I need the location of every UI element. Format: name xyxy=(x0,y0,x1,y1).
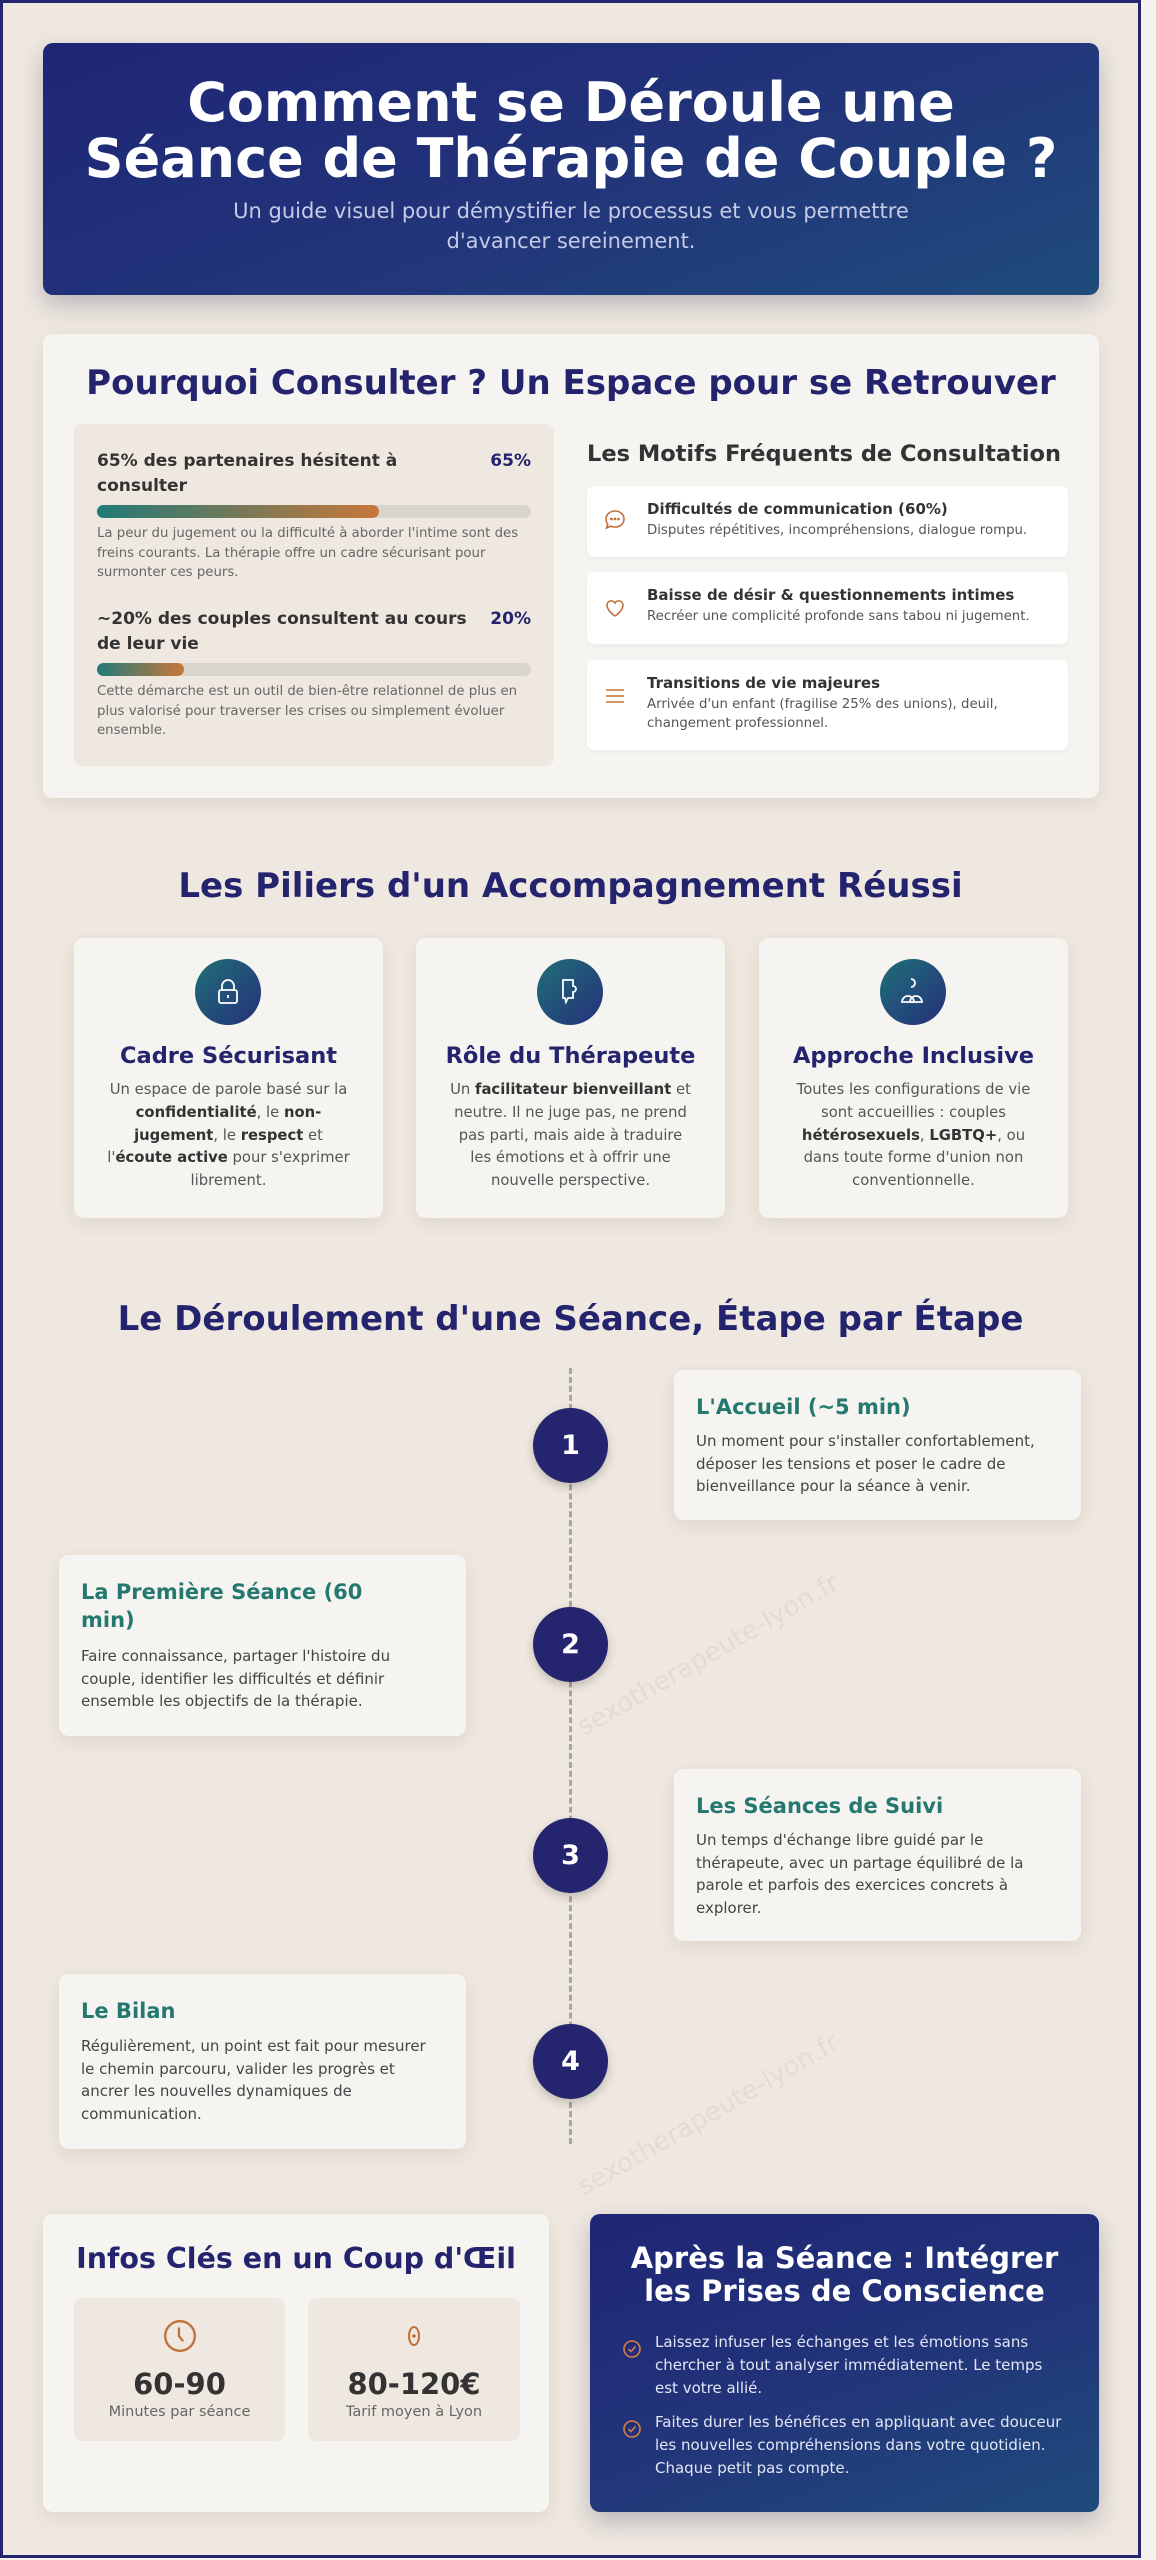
motif: transitions xyxy=(587,660,1068,750)
motif: désir xyxy=(587,572,1068,644)
text: sexotherapeute-lyon.fr xyxy=(572,2028,844,2202)
icon: lines xyxy=(606,689,624,703)
stats box xyxy=(74,424,554,766)
pillar: cadre: Cadre Sécurisant xyxy=(120,1043,337,1069)
motif: désir: Recréer une complicité profonde sans tabou ni jugement. xyxy=(647,609,1030,624)
step 3 card xyxy=(674,1769,1081,1941)
step 4 number xyxy=(533,2024,608,2099)
heading: Pourquoi Consulter ? Un Espace pour se Retrouver xyxy=(86,363,1056,403)
step 1 card: L'Accueil (~5 min) xyxy=(696,1395,911,1419)
motif: transitions: Arrivée d'un enfant (fragilise 25% des unions), deuil, changement professionnel. xyxy=(647,697,998,731)
icon: lock xyxy=(195,959,261,1025)
stat 1: La peur du jugement ou la difficulté à aborder l'intime sont des freins courants. La thérapie offre un cadre sécurisant pour surmonter ces peurs. xyxy=(97,526,518,580)
step 3 card: Les Séances de Suivi xyxy=(696,1794,943,1818)
step 4 card xyxy=(59,1974,466,2149)
step 1 card xyxy=(674,1370,1081,1520)
step 1 card: Un moment pour s'installer confortablement, déposer les tensions et poser le cadre de bienveillance pour la séance à venir. xyxy=(696,1432,1035,1495)
panel: infos clés xyxy=(43,2214,549,2512)
heading: piliers: Les Piliers d'un Accompagnement Réussi xyxy=(178,866,963,906)
step 3 number: 3 xyxy=(561,1840,580,1871)
stat 2 xyxy=(97,609,531,738)
subtitle: Un guide visuel pour démystifier le processus et vous permettre d'avancer sereinement. xyxy=(233,199,909,253)
list item 1: Laissez infuser les échanges et les émotions sans xyxy=(655,2333,1028,2351)
title xyxy=(85,71,1057,190)
title: Séance de Thérapie de Couple ? xyxy=(85,127,1057,190)
heading: les Prises de Conscience xyxy=(644,2274,1045,2308)
step 4 card: communication. xyxy=(81,2105,202,2123)
panel: après la séance xyxy=(590,2214,1099,2512)
motif: transitions: Transitions de vie majeures xyxy=(647,674,880,692)
motif: communication xyxy=(587,486,1068,557)
pillar: cadre: Un espace de parole basé sur la confidentialité, le non-jugement, le respect et l'écoute active pour s'exprimer librement. xyxy=(107,1081,350,1189)
heading: étapes: Le Déroulement d'une Séance, Étape par Étape xyxy=(118,1299,1023,1339)
pillar: thérapeute: Rôle du Thérapeute xyxy=(446,1043,695,1069)
step 1 number: 1 xyxy=(561,1430,580,1461)
motif: désir: Baisse de désir & questionnements intimes xyxy=(647,586,1014,604)
step 4 card: le chemin parcouru, valider les progrès et xyxy=(81,2060,395,2078)
stat 1: 65% des partenaires hésitent à consulter xyxy=(97,451,397,496)
heading xyxy=(630,2241,1058,2308)
step 2 card: min) xyxy=(81,1608,135,1632)
icon: coin xyxy=(408,2326,420,2346)
pillar: thérapeute: Un facilitateur bienveillant et neutre. Il ne juge pas, ne prend pas parti, mais aide à traduire les émotions et à offrir une nouvelle perspective. xyxy=(450,1081,691,1189)
motifs heading: Les Motifs Fréquents de Consultation xyxy=(587,441,1061,467)
step 2 card xyxy=(59,1555,466,1736)
step 4 number: 4 xyxy=(561,2046,580,2077)
icon: clock xyxy=(164,2320,196,2352)
text: sexotherapeute-lyon.fr xyxy=(572,1568,844,1742)
stat: durée xyxy=(74,2298,285,2441)
stat 1: 65% xyxy=(490,451,531,471)
stat 2: Cette démarche est un outil de bien-être relationnel de plus en plus valorisé pour traverser les crises ou simplement évoluer ensemble. xyxy=(97,684,517,738)
list item 2: Faites durer les bénéfices en appliquant avec douceur les nouvelles compréhensions dans votre quotidien. Chaque petit pas compte. xyxy=(655,2413,1061,2477)
step 2 number: 2 xyxy=(561,1629,580,1660)
list item 1: est votre allié. xyxy=(655,2379,762,2397)
step 1 number xyxy=(533,1408,608,1483)
list item 1 xyxy=(623,2333,1042,2397)
stat 1 xyxy=(97,451,531,580)
heading: Infos Clés en un Coup d'Œil xyxy=(76,2242,516,2275)
pillar: inclusive xyxy=(759,938,1068,1218)
pillar: cadre xyxy=(74,938,383,1218)
stat: durée: 60-90 xyxy=(133,2367,226,2401)
step 4 card: Régulièrement, un point est fait pour mesurer xyxy=(81,2037,426,2055)
icon: phone bubble xyxy=(537,959,603,1025)
pillar: inclusive: Toutes les configurations de vie sont accueillies : couples hétérosexuels, LGBTQ+, ou dans toute forme d'union non conventionnelle. xyxy=(797,1081,1030,1189)
stat 2: 20% xyxy=(490,609,531,629)
icon: people xyxy=(880,959,946,1025)
list item 1: chercher à tout analyser immédiatement. Le temps xyxy=(655,2356,1042,2374)
step 2 number xyxy=(533,1607,608,1682)
title: Comment se Déroule une xyxy=(187,71,955,134)
icon: speech bubble xyxy=(605,510,625,530)
step 4 card: Le Bilan xyxy=(81,1999,175,2023)
step 2 card: Faire connaissance, partager l'histoire du couple, identifier les difficultés et définir ensemble les objectifs de la thérapie. xyxy=(81,1647,390,1710)
stat: tarif: Tarif moyen à Lyon xyxy=(346,2404,482,2420)
pillar: thérapeute xyxy=(416,938,725,1218)
step 2 card: La Première Séance (60 xyxy=(81,1580,362,1604)
header banner xyxy=(43,43,1099,295)
heading: Après la Séance : Intégrer xyxy=(631,2241,1058,2275)
stat: tarif xyxy=(308,2298,520,2441)
icon: heart xyxy=(606,600,624,617)
stat 2: ~20% des couples consultent au cours de leur vie xyxy=(97,609,467,654)
stat: tarif: 80-120€ xyxy=(347,2367,481,2401)
timeline line xyxy=(569,1368,572,2144)
panel: pourquoi consulter xyxy=(43,334,1099,798)
step 3 card: Un temps d'échange libre guidé par le thérapeute, avec un partage équilibré de la parole et parfois des exercices concrets à explorer. xyxy=(696,1831,1023,1917)
step 4 card: ancrer les nouvelles dynamiques de xyxy=(81,2082,352,2100)
motif: communication: Disputes répétitives, incompréhensions, dialogue rompu. xyxy=(647,523,1027,538)
step 3 number xyxy=(533,1818,608,1893)
stat: durée: Minutes par séance xyxy=(109,2404,250,2420)
motif: communication: Difficultés de communication (60%) xyxy=(647,500,948,518)
pillar: inclusive: Approche Inclusive xyxy=(793,1043,1034,1069)
